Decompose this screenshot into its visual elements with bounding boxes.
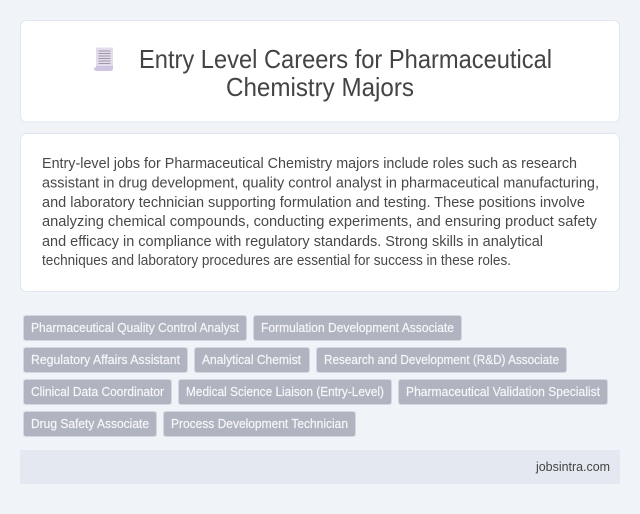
footer: jobsintra.com: [535, 460, 610, 474]
text block: description: analyzing chemical compounds, conducting experiments, and ensuring product safety: [42, 214, 598, 230]
tag: Formulation Development Associate: [261, 321, 454, 335]
tags: career list: [24, 316, 608, 436]
tag: [24, 316, 246, 340]
title: [139, 44, 552, 102]
icon: document scroll: [94, 48, 113, 71]
tag: [254, 316, 462, 340]
tag: Analytical Chemist: [202, 353, 301, 367]
tag: Pharmaceutical Quality Control Analyst: [31, 321, 240, 335]
title: Chemistry Majors: [226, 72, 414, 102]
tag: [316, 348, 566, 372]
tag: Research and Development (R&D) Associate: [324, 353, 559, 367]
tag: Medical Science Liaison (Entry-Level): [186, 385, 384, 399]
text block: description: [42, 156, 599, 269]
tag: Regulatory Affairs Assistant: [31, 353, 181, 367]
text block: description: Entry-level jobs for Pharmaceutical Chemistry majors include roles such as research: [42, 156, 577, 172]
text block: description: techniques and laboratory procedures are essential for success in these roles.: [42, 253, 511, 269]
text block: description: and laboratory technician supporting formulation and testing. These positions involve: [42, 195, 585, 211]
panel: header: [20, 20, 620, 122]
panel: description: [20, 134, 620, 292]
tag: [178, 380, 392, 404]
title: Entry Level Careers for Pharmaceutical: [139, 44, 552, 74]
tag: [24, 348, 188, 372]
tag: Drug Safety Associate: [31, 417, 149, 431]
tag: Clinical Data Coordinator: [31, 385, 164, 399]
tag: [164, 412, 356, 436]
tag: [24, 380, 172, 404]
tag: [194, 348, 310, 372]
tag: Pharmaceutical Validation Specialist: [406, 385, 600, 399]
footer: [20, 450, 620, 484]
tag: [398, 380, 608, 404]
tag: [24, 412, 156, 436]
text block: description: assistant in drug development, quality control analyst in pharmaceutical manufacturing,: [42, 176, 599, 192]
tag: Process Development Technician: [171, 417, 348, 431]
text block: description: and efficacy in compliance with regulatory standards. Strong skills in analytical: [42, 234, 543, 250]
